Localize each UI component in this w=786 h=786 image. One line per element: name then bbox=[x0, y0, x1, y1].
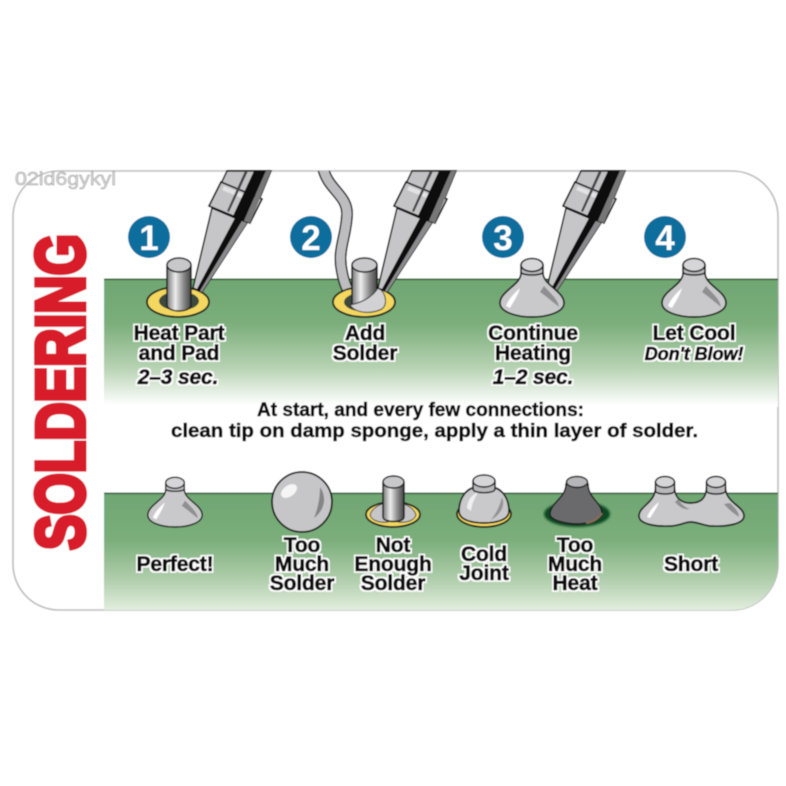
label: continue heating: Continue bbox=[488, 322, 578, 345]
label: continue heating: 1–2 sec. bbox=[493, 366, 573, 389]
badge 2 bbox=[290, 216, 332, 258]
label: add solder: Solder bbox=[333, 342, 397, 365]
label: not enough solder: Enough bbox=[354, 553, 432, 576]
label: too much solder: Too bbox=[284, 534, 320, 557]
icon: sparse joint bbox=[366, 476, 420, 527]
icon: solder joint bbox=[662, 258, 726, 317]
icon: pad, pin and molten solder bbox=[333, 258, 395, 317]
label: heat part and pad: 2–3 sec. bbox=[137, 366, 218, 389]
label: short: Short bbox=[664, 553, 718, 576]
label: too much solder: Solder bbox=[270, 572, 334, 595]
icon: pad and pin bbox=[147, 258, 209, 317]
label: heat part and pad: and Pad bbox=[139, 342, 219, 365]
title: SOLDERING: SOLDERING bbox=[22, 234, 99, 550]
badge 1 bbox=[128, 216, 170, 258]
instruction text bbox=[171, 400, 698, 442]
icon: soldering iron 1 bbox=[193, 171, 271, 292]
step 2: add solder bbox=[290, 168, 456, 365]
instruction text: At start, and every few connections: bbox=[257, 400, 584, 421]
step 4: let cool bbox=[644, 216, 743, 364]
icon: solder joint bbox=[500, 258, 564, 317]
label: add solder: Add bbox=[345, 322, 385, 345]
step 1: heat part and pad bbox=[128, 171, 271, 389]
label: continue heating: Heating bbox=[495, 342, 571, 365]
icon: burnt joint bbox=[544, 476, 610, 527]
card background bbox=[13, 171, 778, 610]
label: too much heat: Heat bbox=[553, 572, 598, 595]
icon: perfect joint bbox=[148, 477, 202, 527]
label: heat part and pad: Heat Part bbox=[134, 322, 224, 345]
label: not enough solder: Not bbox=[376, 534, 410, 557]
label: cold joint: Cold bbox=[461, 543, 507, 566]
label: let cool: Let Cool bbox=[653, 322, 735, 345]
icon: solder ball bbox=[272, 472, 332, 532]
label: too much solder: Much bbox=[275, 553, 329, 576]
badge 4: 4 bbox=[655, 219, 675, 258]
icon: cold joint bbox=[457, 475, 511, 527]
watermark: 02id6gykyl bbox=[15, 168, 116, 189]
label: perfect: Perfect! bbox=[136, 553, 214, 576]
icon: bridged joints bbox=[639, 476, 744, 526]
label: cold joint: Joint bbox=[459, 562, 509, 585]
badge 3 bbox=[482, 216, 524, 258]
example: not enough solder bbox=[354, 476, 432, 595]
instruction text: clean tip on damp sponge, apply a thin layer of solder. bbox=[171, 420, 698, 442]
panel: top green board bbox=[104, 278, 780, 407]
badge 2: 2 bbox=[301, 219, 321, 258]
label: too much heat: Much bbox=[548, 553, 602, 576]
label: let cool: Don't Blow! bbox=[645, 344, 743, 364]
panel: bottom green board bbox=[104, 492, 780, 611]
label: not enough solder: Solder bbox=[361, 572, 425, 595]
badge 3: 3 bbox=[493, 219, 513, 258]
step 3: continue heating bbox=[482, 171, 625, 389]
example: short bbox=[639, 476, 744, 576]
example: too much heat bbox=[544, 476, 610, 595]
example: too much solder bbox=[270, 472, 334, 595]
example: perfect bbox=[136, 477, 214, 576]
icon: solder wire bbox=[317, 170, 354, 292]
badge 1: 1 bbox=[139, 219, 159, 258]
badge 4 bbox=[644, 216, 686, 258]
example: cold joint bbox=[457, 475, 511, 585]
icon: soldering iron 3 bbox=[547, 171, 625, 292]
label: too much heat: Too bbox=[557, 534, 593, 557]
icon: soldering iron 2 bbox=[378, 171, 456, 292]
